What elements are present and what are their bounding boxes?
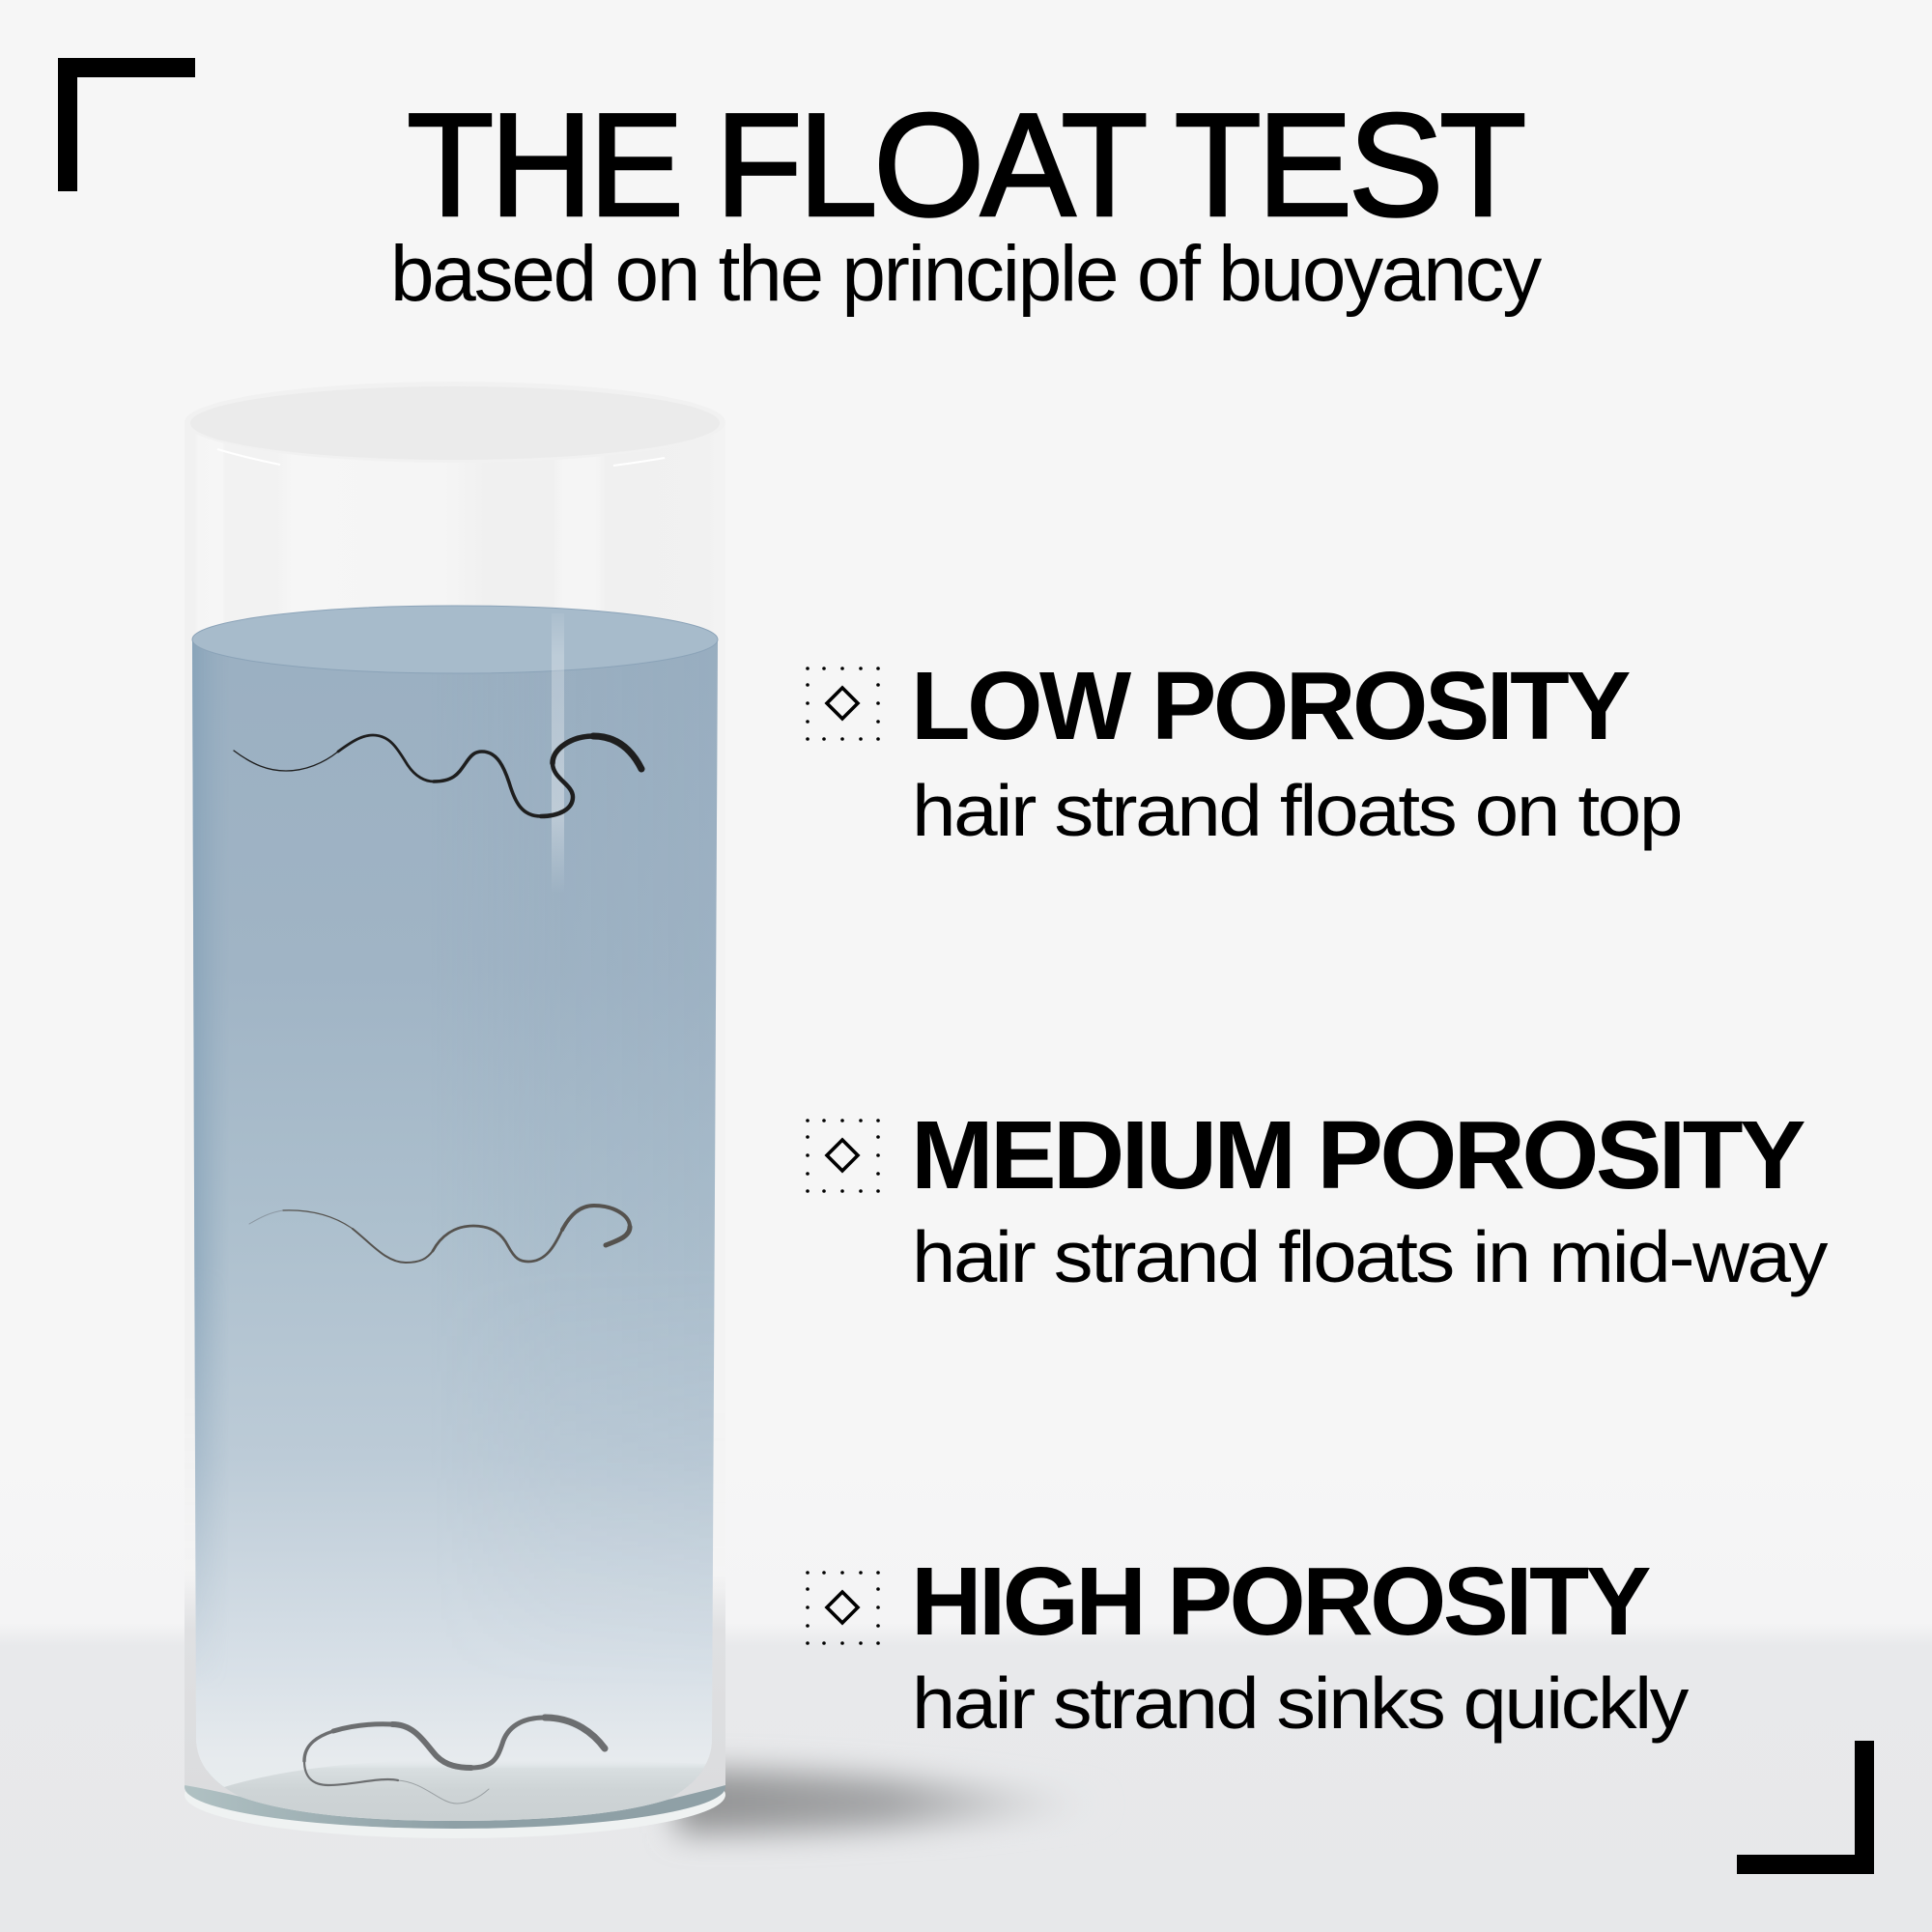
- item: medium porosity: [808, 1101, 1829, 1297]
- item: high porosity: [808, 1548, 1690, 1744]
- title: THE FLOAT TEST: [407, 83, 1524, 247]
- rim highlights: [217, 449, 665, 466]
- hair strand: low porosity: [234, 735, 641, 816]
- heading: HIGH POROSITY: [911, 1548, 1651, 1656]
- description: hair strand floats in mid-way: [912, 1216, 1829, 1297]
- corner bracket: bottom right: [1737, 1741, 1874, 1874]
- cast shadow: [676, 1770, 1101, 1833]
- icon: dotted diamond: [808, 668, 878, 739]
- hair strand: medium porosity: [249, 1206, 630, 1263]
- glass rim inner: [190, 386, 720, 460]
- glass with water and hair strands: [185, 382, 1101, 1838]
- hair strand: high porosity: [304, 1718, 605, 1804]
- item: low porosity: [808, 652, 1681, 851]
- icon: dotted diamond: [808, 1573, 878, 1643]
- water body: [192, 607, 718, 1821]
- water bottom shadow: [224, 1766, 704, 1821]
- glass rim: [185, 382, 725, 463]
- water side shading: [192, 641, 218, 1619]
- corner bracket: top left: [58, 58, 195, 191]
- icon: dotted diamond: [808, 1121, 878, 1191]
- glass body: [185, 422, 725, 1789]
- glass lower walls: [185, 1575, 725, 1800]
- description: hair strand floats on top: [912, 770, 1681, 851]
- heading: MEDIUM POROSITY: [911, 1101, 1805, 1209]
- glass base dark band: [185, 1746, 725, 1829]
- water highlight: [552, 613, 564, 894]
- glass base: [185, 1751, 725, 1838]
- subtitle: based on the principle of buoyancy: [390, 230, 1542, 318]
- water surface: [192, 606, 718, 673]
- heading: LOW POROSITY: [911, 652, 1631, 760]
- description: hair strand sinks quickly: [912, 1662, 1690, 1744]
